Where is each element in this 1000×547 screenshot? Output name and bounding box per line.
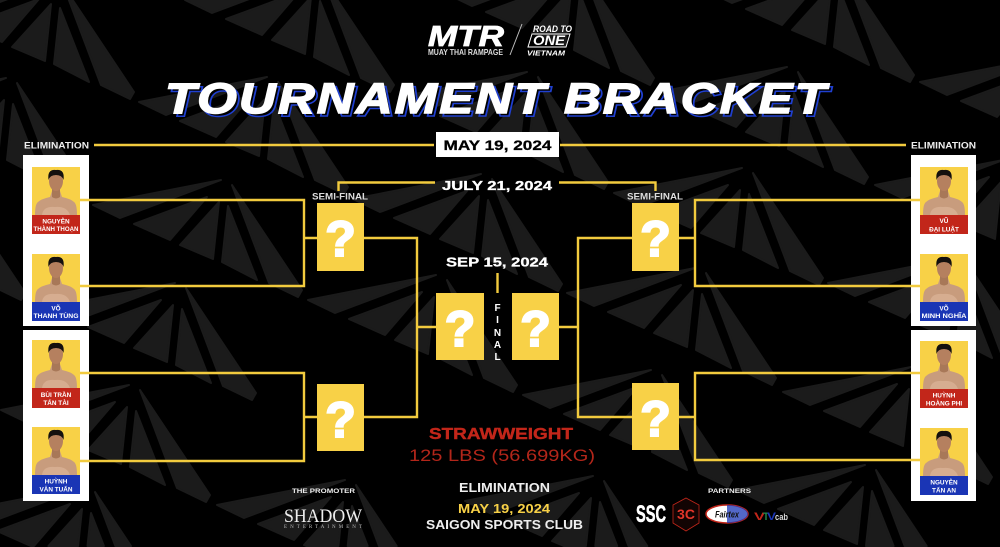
- final slot: right: ?: [520, 301, 551, 357]
- weight class: 125 LBS (56.699KG): [409, 446, 595, 465]
- logo: VTVcab: cab: [775, 512, 788, 522]
- promoter: SHADOW: [284, 506, 362, 527]
- logo: Muay Thai Rampage and Road to One: ONE: [533, 32, 566, 48]
- fighter: Bùi Trần Tấn Tài: [32, 340, 80, 408]
- bracket connectors: [80, 200, 920, 461]
- final slot: right: [512, 293, 559, 360]
- logo: Muay Thai Rampage and Road to One: MUAY THAI RAMPAGE: [428, 47, 503, 57]
- panel: right top fighters: [911, 155, 976, 326]
- fighter: Võ Minh Nghĩa: VÕ: [939, 304, 949, 312]
- fighter: Huỳnh Hoàng Phi: [920, 341, 968, 408]
- fighter: Võ Thanh Tùng: [32, 254, 80, 321]
- fighter: Bùi Trần Tấn Tài: TẤN TÀI: [43, 397, 69, 407]
- final slot: left: [436, 293, 484, 360]
- fighter: Nguyễn Thành Thoạn: [32, 167, 80, 234]
- final date: Sep 15: SEP 15, 2024: [446, 254, 549, 270]
- fighter: Nguyễn Tấn An: NGUYỄN: [930, 478, 958, 486]
- logo: Fairtex: [706, 505, 748, 523]
- fighter: Huỳnh Văn Tuấn: HUỲNH: [45, 476, 68, 486]
- semi-final slot: right bottom: ?: [640, 391, 671, 447]
- semi-final label right: SEMI-FINAL: [627, 192, 684, 202]
- fighter: Huỳnh Văn Tuấn: VĂN TUẤN: [39, 484, 73, 494]
- semi-final slot: left top: ?: [325, 211, 356, 267]
- semi-final slot: right bottom: [632, 383, 679, 450]
- logo: Muay Thai Rampage and Road to One: VIETNAM: [527, 48, 566, 58]
- final vertical label: I: [496, 315, 499, 326]
- logo: VTVcab: [754, 511, 788, 523]
- event info: MAY 19, 2024: [458, 502, 550, 516]
- fighter: Huỳnh Hoàng Phi: HUỲNH: [933, 390, 956, 400]
- fighter: Vũ Đại Luật: [920, 167, 968, 234]
- date badge: May 19: [436, 132, 559, 157]
- panel: left top fighters: [23, 155, 89, 326]
- logo: 3C: [673, 498, 699, 531]
- logo: Muay Thai Rampage and Road to One: MTR: [428, 21, 504, 53]
- final vertical label: F: [494, 303, 501, 314]
- semi-final label left: SEMI-FINAL: [312, 192, 369, 202]
- event info: [426, 481, 583, 532]
- fighter: Vũ Đại Luật: VŨ: [940, 216, 949, 225]
- fighter: Nguyễn Thành Thoạn: THÀNH THOẠN: [34, 224, 79, 233]
- logo: Fairtex: Fairtex: [715, 510, 740, 520]
- final vertical label: [494, 303, 501, 363]
- semi-final slot: right top: ?: [640, 211, 671, 267]
- partners: [636, 488, 788, 531]
- fighter: Huỳnh Văn Tuấn: [32, 427, 80, 494]
- event info: ELIMINATION: [459, 481, 550, 495]
- semi-final slot: left bottom: ?: [325, 392, 356, 448]
- elimination heading left: ELIMINATION: [24, 140, 89, 152]
- partners: PARTNERS: [708, 488, 752, 495]
- elimination heading right: ELIMINATION: [911, 140, 976, 152]
- fighter: Vũ Đại Luật: ĐẠI LUẬT: [929, 224, 959, 234]
- panel: right bottom fighters: [911, 330, 976, 501]
- fighter: Nguyễn Thành Thoạn: NGUYỄN: [42, 216, 70, 226]
- logo: 3C: 3C: [677, 506, 695, 522]
- logo: SSC: SSC: [636, 501, 666, 528]
- promoter: ENTERTAINMENT: [284, 525, 362, 530]
- weight class: [409, 426, 595, 465]
- fighter: Võ Minh Nghĩa: [920, 254, 968, 321]
- event info: SAIGON SPORTS CLUB: [426, 518, 583, 532]
- semi-final slot: right top: [632, 203, 679, 271]
- fighter: Võ Minh Nghĩa: MINH NGHĨA: [922, 311, 967, 320]
- logo: VTVcab: V: [767, 511, 777, 523]
- final slot: left: ?: [445, 301, 475, 357]
- panel: left bottom fighters: [23, 330, 89, 501]
- logo: Muay Thai Rampage and Road to One: [428, 21, 572, 58]
- fighter: Võ Thanh Tùng: VÕ: [51, 304, 61, 312]
- final vertical label: A: [494, 340, 501, 351]
- semi-final slot: left top: [317, 203, 364, 271]
- semi-final date: July 21: [338, 178, 656, 193]
- logo: VTVcab: V: [754, 511, 766, 523]
- title: TOURNAMENT BRACKET: [165, 74, 830, 122]
- fighter: Huỳnh Hoàng Phi: HOÀNG PHI: [926, 398, 962, 408]
- date badge: May 19: MAY 19, 2024: [444, 137, 552, 153]
- promoter: [284, 488, 362, 530]
- fighter: Nguyễn Tấn An: TẤN AN: [932, 484, 956, 494]
- title: TOURNAMENT BRACKET: [168, 77, 833, 125]
- final vertical label: L: [494, 352, 501, 363]
- semi-final date: July 21: JULY 21, 2024: [442, 178, 553, 193]
- final vertical label: N: [494, 328, 501, 339]
- elimination date line: [94, 144, 906, 146]
- fighter: Bùi Trần Tấn Tài: BÙI TRẦN: [41, 389, 72, 399]
- promoter: THE PROMOTER: [292, 488, 355, 495]
- semi-final slot: left bottom: [317, 384, 364, 451]
- weight class: STRAWWEIGHT: [429, 426, 573, 443]
- logo: Muay Thai Rampage and Road to One: ROAD TO: [533, 24, 572, 34]
- fighter: Võ Thanh Tùng: THANH TÙNG: [34, 311, 79, 320]
- logo: VTVcab: T: [763, 511, 769, 523]
- fighter: Nguyễn Tấn An: [920, 428, 968, 495]
